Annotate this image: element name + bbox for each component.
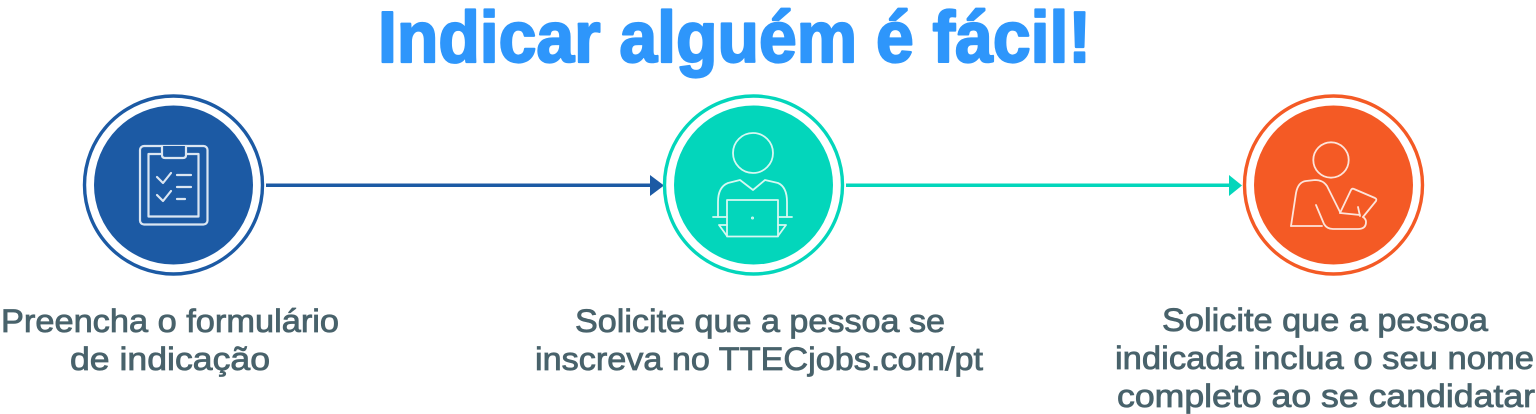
step 3 caption: Solicite que a pessoa <box>1162 302 1488 338</box>
step 3 caption: completo ao se candidatar <box>1117 378 1535 414</box>
icon: person with laptop <box>713 133 792 236</box>
step 1 circle with clipboard icon <box>84 96 262 274</box>
step 3 circle with person reading tablet icon <box>1244 96 1422 274</box>
arrow: step 2 to step 3 <box>846 175 1242 196</box>
arrow: step 1 to step 2 <box>266 175 664 196</box>
title: Indicar alguém é fácil! <box>378 0 1091 78</box>
step 2 caption <box>535 303 983 377</box>
step 3 caption <box>1115 302 1535 414</box>
step 1 caption <box>1 303 339 377</box>
step 2 caption: Solicite que a pessoa se <box>575 303 945 339</box>
step 3 caption: indicada inclua o seu nome <box>1115 340 1534 376</box>
step 2 circle with person at laptop icon <box>664 96 842 274</box>
step 1 caption: Preencha o formulário <box>1 303 339 339</box>
icon: person with tablet <box>1291 142 1376 229</box>
step 2 caption: inscreva no TTECjobs.com/pt <box>535 341 983 377</box>
icon: clipboard checklist <box>140 146 208 224</box>
step 1 caption: de indicação <box>70 341 270 377</box>
